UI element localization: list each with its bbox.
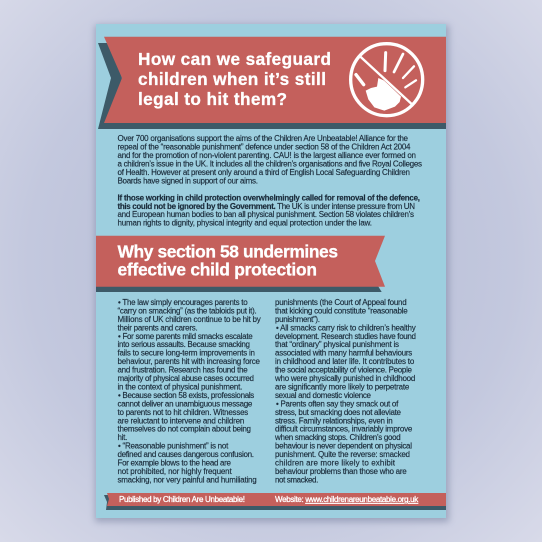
left column text: themselves do not complain about being <box>118 425 251 434</box>
banner shadow <box>98 43 446 129</box>
intro text: If those working in child protection overwhelmingly called for removal of the defence, <box>118 193 420 202</box>
header title: legal to hit them? <box>138 89 287 109</box>
page shadow <box>95 25 449 522</box>
icon: crossed-out hand <box>351 44 423 116</box>
left column text: are reluctant to intervene and children <box>118 416 244 425</box>
right column text: that “ordinary” physical punishment is <box>275 340 399 349</box>
intro text: this could not be ignored by the Government. The UK is under intense pressure from UN <box>118 202 415 211</box>
header title <box>138 49 331 109</box>
intro text: of Health. However at present only around a third of English Local Safeguarding Children <box>118 168 410 177</box>
left column text: • For some parents mild smacks escalate <box>118 332 253 341</box>
left column text: defined and causes dangerous confusion. <box>118 450 254 459</box>
right column text: associated with many harmful behaviours <box>275 349 412 358</box>
right column text: stress. Family relationships, even in <box>275 416 393 425</box>
right column text: behaviour problems than those who are <box>275 467 407 476</box>
right column text: who were physically punished in childhood <box>274 374 415 383</box>
intro text: a children’s issue in the UK. It includes all the children’s organisations and five Royal Colleges <box>118 159 422 168</box>
banner ribbon <box>104 37 446 123</box>
right column text: the social acceptability of violence. People <box>275 366 413 375</box>
section banner shadow <box>96 286 382 292</box>
left column text: not prohibited, nor highly frequent <box>118 467 232 476</box>
intro text: and European human bodies to ban all physical punishment. Section 58 violates children’s <box>118 210 414 219</box>
right column text: are significantly more likely to perpetrate <box>275 382 410 392</box>
left column text: fails to secure long-term improvements in <box>118 349 255 358</box>
left column text: and frustration. Research has found the <box>118 366 248 375</box>
right column text: punishment”). <box>275 315 320 324</box>
left column text: • Because section 58 exists, professionals <box>118 391 254 400</box>
right column text: in childhood and later life. It contributes to <box>275 357 415 366</box>
right column text: children are more likely to exhibit <box>275 458 396 468</box>
section heading <box>118 242 338 280</box>
intro text: and for the promotion of non-violent parenting. CAU! is the largest alliance ever formed on <box>118 151 416 160</box>
left column text: hit. <box>118 433 127 442</box>
intro text: human rights to dignity, physical integrity and equal protection under the law. <box>118 219 372 228</box>
left column text: behaviour, parents hit with increasing force <box>118 357 261 366</box>
right column text: not smacked. <box>275 475 318 484</box>
right column text: that kicking could constitute “reasonable <box>275 306 408 315</box>
footer banner <box>104 493 446 510</box>
section heading: effective child protection <box>118 260 317 280</box>
footer shadow <box>107 505 446 510</box>
left column text: majority of physical abuse cases occurred <box>118 374 254 383</box>
intro text: Boards have signed in support of our aims. <box>118 176 258 185</box>
right column text: punishment. Quite the reverse: smacked <box>275 450 410 459</box>
left column text: • The law simply encourages parents to <box>118 298 248 307</box>
left column text <box>118 298 261 484</box>
header banner <box>98 37 446 129</box>
footer publisher text: Published by Children Are Unbeatable! <box>119 495 245 504</box>
footer website text: Website: www.childrenareunbeatable.org.uk <box>275 495 419 504</box>
left column text: in the context of physical punishment. <box>118 382 242 392</box>
left column text: into serious assaults. Because smacking <box>118 340 250 349</box>
header title: How can we safeguard <box>138 49 331 69</box>
leaflet page <box>96 24 446 518</box>
right column text: development. Research studies have found <box>275 332 416 341</box>
left column text: “carry on smacking” (as the tabloids put it). <box>118 306 257 315</box>
intro text: repeal of the “reasonable punishment” defence under section 58 of the Children Act 2004 <box>118 142 411 152</box>
right column text: • All smacks carry risk to children’s healthy <box>276 323 416 332</box>
left column text: smacking, nor very painful and humiliating <box>118 475 257 484</box>
right column text: stress, but smacking does not alleviate <box>275 408 402 417</box>
footer fold <box>104 495 110 510</box>
left column text: to parents not to hit children. Witnesses <box>118 408 248 417</box>
footer ribbon <box>107 493 446 506</box>
right column text: punishments (the Court of Appeal found <box>275 298 407 307</box>
right column text: when smacking stops. Children’s good <box>274 433 401 442</box>
right column text: • Parents often say they smack out of <box>276 399 399 408</box>
section heading: Why section 58 undermines <box>118 242 338 262</box>
left column text: their parents and carers. <box>118 323 198 332</box>
right column text: difficult circumstances, invariably improve <box>275 425 413 434</box>
left column text: Millions of UK children continue to be hit by <box>118 315 261 324</box>
right column text: behaviour is never dependent on physical <box>275 442 412 451</box>
right column text: sexual and domestic violence <box>275 391 372 400</box>
left column text: cannot deliver an unambiguous message <box>118 399 253 408</box>
header title: children when it’s still <box>138 69 326 89</box>
left column text: • “Reasonable punishment” is not <box>118 442 229 451</box>
intro text: Over 700 organisations support the aims of the Children Are Unbeatable! Alliance for the <box>118 134 409 143</box>
section banner <box>96 236 385 292</box>
right column text <box>274 298 416 484</box>
intro text <box>118 134 422 228</box>
section banner ribbon <box>96 236 385 287</box>
left column text: For example blows to the head are <box>118 458 232 468</box>
